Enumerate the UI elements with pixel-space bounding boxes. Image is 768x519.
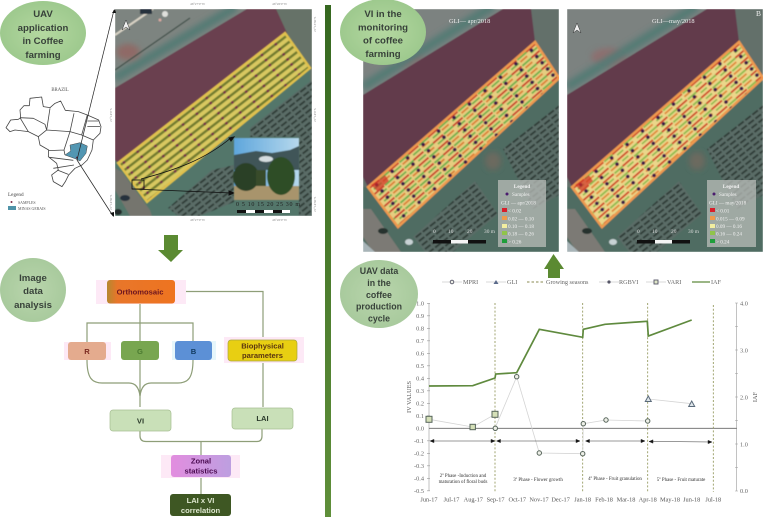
map coordinate ticks: 21°14'30"S [109, 194, 113, 210]
flow node: Zonal statistics: Zonal [191, 456, 211, 466]
map legend: 0.09 — 0.16 [716, 224, 742, 230]
map legend: 0.16 — 0.24 [716, 232, 742, 238]
right axis title: IAF [752, 391, 759, 402]
heading circle: UAV application: in Coffee [22, 36, 64, 47]
month labels: Nov-17 [529, 496, 549, 504]
vertical green divider [325, 5, 331, 517]
map coordinate ticks: 21°14'0"S [313, 108, 317, 122]
left axis labels: 0.7 [416, 338, 424, 345]
map coordinate ticks: 21°13'30"S [313, 16, 317, 32]
arrow: down to analysis [158, 235, 183, 262]
panel: GLI April map [363, 6, 559, 252]
map legend: > 0.24 [716, 240, 730, 246]
scale bar map A: 0 5 10 15 20 25 30 m [236, 202, 300, 208]
chart legend: IAF [711, 279, 722, 286]
map coordinate ticks: 21°14'0"S [109, 108, 113, 122]
heading circle: Image data analysis: Image [19, 273, 47, 284]
scale bar [433, 229, 496, 244]
flow node: Orthomosaic: Orthomosaic [117, 288, 163, 296]
BRAZIL label: BRAZIL [51, 88, 69, 93]
scale bar [637, 229, 700, 244]
phase labels: 3º Phase - Flower growth [513, 477, 563, 483]
heading circle: UAV data [340, 260, 418, 328]
heading circle: Image data analysis: data [23, 286, 44, 297]
left axis labels: 1.0 [416, 300, 424, 308]
map coordinate ticks: 46°26'0"W [272, 2, 288, 6]
inset photo of coffee trees [233, 138, 299, 200]
heading circle: VI monitoring: VI in the [364, 9, 402, 20]
Brazil legend: MINAS GERAIS [18, 207, 46, 211]
phase labels: 5º Phase - Fruit maturate [657, 477, 705, 483]
icon: north arrow [573, 23, 581, 33]
flow node: G [121, 341, 159, 360]
Minas Gerais highlighted [65, 143, 87, 161]
left axis labels: -0.1 [414, 438, 424, 445]
heading circle: VI monitoring: monitoring [358, 22, 408, 34]
map title: GLI—may/2018 [652, 18, 695, 25]
GLI series [645, 396, 695, 406]
month labels: Dec-17 [551, 496, 570, 504]
panel letter: B [756, 9, 761, 18]
month labels: Jun-17 [420, 496, 438, 504]
heading circle: UAV data: in the [367, 278, 391, 288]
left axis labels: 0.5 [416, 363, 424, 370]
flow node: Zonal statistics: statistics [185, 466, 217, 476]
month labels: Apr-18 [639, 496, 657, 504]
left axis labels: 0.8 [416, 326, 424, 332]
map legend: Legend [723, 184, 739, 190]
leader lines from Brazil to map [77, 9, 116, 217]
left axis labels: -0.2 [414, 450, 424, 458]
month labels: May-18 [660, 496, 680, 504]
growing season dashed lines [495, 303, 713, 492]
month labels: Jan-18 [574, 496, 591, 504]
map legend: < 0.01 [716, 208, 730, 214]
scale bar: 0 [637, 229, 640, 235]
left axis labels: 0.1 [416, 413, 424, 420]
left axis labels: -0.4 [414, 476, 425, 482]
month labels [420, 496, 721, 504]
flow node: VI: VI [137, 416, 144, 426]
chart legend: VARI [667, 279, 681, 286]
callout lines from sample to inset photo [132, 137, 234, 195]
map legend: 0.02 — 0.10 [508, 216, 534, 222]
map legend: Legend [514, 184, 530, 190]
chart legend [442, 279, 722, 286]
Brazil legend [8, 192, 46, 211]
map legend: 0.015 — 0.09 [716, 216, 745, 222]
month labels: Sep-17 [487, 496, 505, 504]
flow node: Zonal statistics [161, 455, 240, 478]
map legend: < 0.02 [508, 208, 522, 214]
map legend: GLI — apr/2018 [501, 200, 536, 206]
scale bar: 20 [467, 229, 473, 235]
phase labels [439, 473, 705, 485]
left axis labels: -0.3 [414, 463, 424, 470]
left axis labels: 0.9 [416, 313, 424, 320]
flow node: R: R [84, 347, 90, 356]
scale bar: 10 [448, 229, 454, 235]
month labels: Feb-18 [595, 496, 613, 504]
heading circle: VI monitoring: farming [365, 49, 401, 60]
left axis labels: -0.5 [414, 488, 424, 495]
month labels: Jun-18 [683, 496, 700, 504]
phase labels: 4º Phase - Fruit granulation [588, 476, 642, 482]
scale bar: 20 [671, 229, 677, 235]
scale bar: 0 [433, 229, 436, 235]
heading circle: UAV application: UAV [33, 9, 53, 20]
scale bar: 30 m [688, 229, 700, 235]
axis titles: IV VALUES [406, 381, 413, 413]
heading circle: UAV data: coffee [366, 290, 392, 300]
study strip with sample rows [118, 33, 310, 202]
month labels: Oct-17 [509, 496, 526, 504]
right axis labels: 2.0 [740, 394, 748, 401]
heading circle: VI monitoring [340, 0, 426, 65]
heading circle: UAV application [0, 1, 86, 65]
phase labels: maturation of floral buds [439, 480, 487, 485]
chart legend: MPRI [463, 279, 478, 286]
Brazil legend: Legend [8, 192, 24, 198]
flow node: B: B [191, 347, 197, 356]
scale bar: 10 [652, 229, 658, 235]
flow node: R [64, 342, 111, 360]
right axis labels: 0.0 [740, 488, 748, 495]
heading circle: UAV data: cycle [368, 314, 390, 324]
flow node: LAI x VI correlation: correlation [181, 506, 220, 515]
flow node: Biophysical parameters: Biophysical [241, 342, 284, 350]
Brazil locator map [6, 97, 101, 187]
map coordinate ticks: 46°27'0"W [190, 2, 206, 6]
map coordinate ticks: 21°14'30"S [313, 196, 317, 212]
map legend: 0.10 — 0.18 [508, 224, 534, 230]
map legend: Samples [719, 192, 737, 198]
VARI series [426, 411, 498, 430]
map legend: GLI — may/2018 [709, 200, 747, 206]
right axis labels [740, 300, 748, 495]
chart legend: RGBVI [619, 279, 638, 286]
flow node: LAI x VI correlation: LAI x VI [187, 496, 214, 505]
left axis labels: 0.6 [416, 350, 424, 358]
flow node: Orthomosaic [96, 280, 186, 304]
heading circle: UAV application: farming [25, 50, 61, 61]
arrow: up to maps [544, 254, 564, 278]
month labels: Jul-18 [705, 496, 721, 504]
map legend [707, 180, 756, 247]
map legend: > 0.26 [508, 240, 522, 246]
map legend: 0.18 — 0.26 [508, 232, 534, 238]
heading circle: UAV data: UAV data [360, 266, 398, 276]
chart legend: GLI [507, 279, 517, 286]
MPRI series [493, 374, 650, 456]
scale bar map A [236, 202, 300, 213]
map title: GLI— apr/2018 [449, 18, 490, 25]
month labels: Aug-17 [464, 496, 483, 504]
Brazil legend: SAMPLES [18, 201, 36, 205]
map coordinate ticks: 46°27'0"W [190, 218, 206, 222]
map coordinate ticks [109, 2, 317, 222]
flow node: Biophysical parameters: parameters [242, 351, 283, 360]
panel: GLI May map [567, 6, 763, 252]
axes [427, 303, 738, 491]
chart: VI and LAI over production cycle [406, 279, 759, 504]
Brazil outline and states [6, 97, 101, 187]
heading circle: UAV application: application [18, 23, 68, 34]
flow node: LAI: LAI [256, 414, 269, 423]
phase labels: 2º Phase -Induction and [440, 473, 487, 479]
scale bar: 30 m [484, 229, 496, 235]
flow node: LAI x VI correlation [170, 494, 231, 516]
panel: UAV map with study area [114, 7, 312, 216]
right axis labels: 1.0 [740, 441, 748, 448]
flow node: LAI [232, 408, 293, 429]
map legend [498, 180, 546, 247]
phase arrows [430, 439, 712, 444]
icon: north arrow A [122, 20, 130, 30]
flow node: VI [110, 410, 171, 431]
heading circle: Image data analysis: analysis [14, 300, 52, 311]
IAF line [429, 320, 692, 386]
month labels: Mar-18 [617, 496, 635, 504]
flowchart connectors [87, 292, 263, 494]
flow node: G: G [137, 347, 143, 356]
heading circle: UAV data: production [356, 302, 402, 312]
left axis labels: 0.0 [416, 426, 424, 432]
month labels: Jul-17 [444, 496, 459, 504]
flow node: B [172, 341, 216, 360]
right axis labels: 3.0 [740, 347, 748, 354]
chart legend: Growing seasons [546, 279, 589, 286]
left axis labels: 0.2 [416, 400, 424, 408]
heading circle: VI monitoring: of coffee [363, 36, 403, 46]
map legend: Samples [512, 192, 530, 198]
left axis labels [414, 300, 425, 495]
heading circle: Image data analysis [0, 258, 66, 322]
left axis labels: 0.3 [416, 388, 424, 395]
map coordinate ticks: 46°26'0"W [272, 218, 288, 222]
flow node: Biophysical parameters [224, 337, 304, 363]
right axis labels: 4.0 [740, 300, 748, 308]
left axis labels: 0.4 [416, 376, 425, 382]
